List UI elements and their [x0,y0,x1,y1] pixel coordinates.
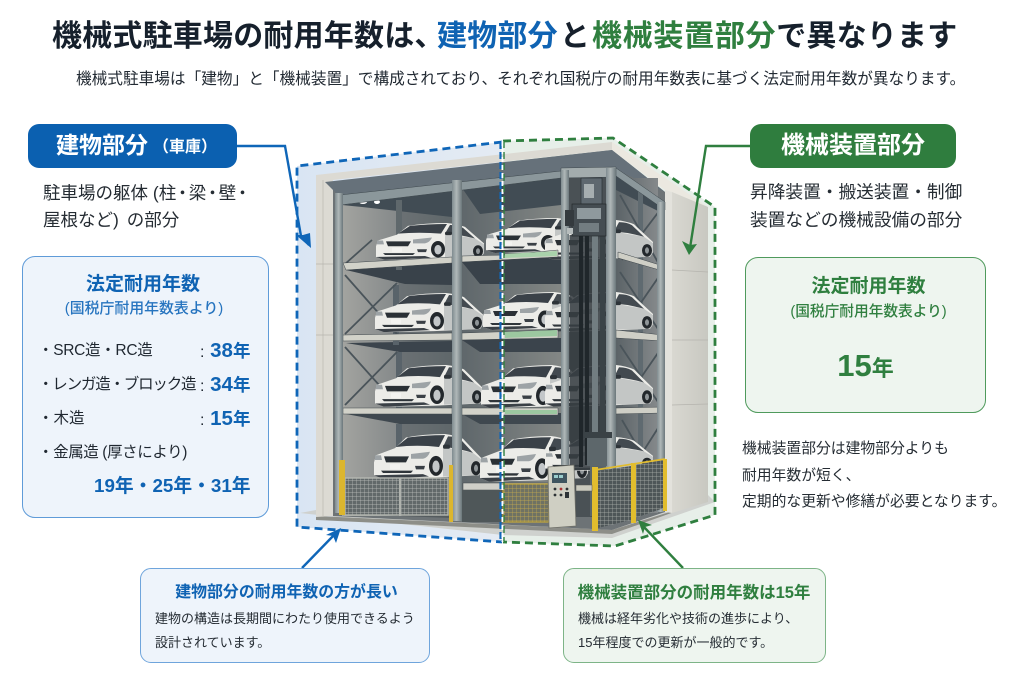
row: wood: ・木造 [38,410,85,427]
callout heading: 建物部分の耐用年数の方が長い [175,584,398,601]
region: machinery part tint [503,138,715,546]
arrow: building callout to structure [302,528,341,568]
badge: machinery part [750,124,956,168]
description: machinery part: 昇降装置・搬送装置・制御 [750,182,962,202]
parking bays back walls [342,172,660,520]
dashed outline: machinery part [503,138,715,546]
parked cars [374,218,653,482]
safety fences [339,459,667,531]
callout body: 機械は経年劣化や技術の進歩により、 [578,611,798,626]
callout body: 設計されています。 [155,635,270,650]
callout: building part [140,568,430,663]
floor slab [300,495,715,538]
value: 15 years: 15年 [837,348,894,383]
value: 34 years: : 34年 [200,373,250,396]
lift mechanism [565,178,612,516]
arrow: building badge to structure [237,146,311,248]
shelves [343,250,663,522]
callout body: 15年程度での更新が一般的です。 [578,635,773,650]
description: machinery part [750,182,962,230]
description: building part: 駐車場の躯体 (柱・梁・壁・ [43,183,249,203]
value: 38 years: : 38年 [200,339,250,362]
row: brick block: ・レンガ造・ブロック造 [38,376,195,393]
callout body [578,611,798,650]
callout body: 建物の構造は長期間にわたり使用できるよう [155,611,415,626]
steel columns and beams [335,167,665,523]
panel source: (国税庁耐用年数表より) [790,304,947,320]
value: 15 years: : 15年 [200,407,250,430]
panel heading: 法定耐用年数 [811,276,926,297]
value: metal years: 19年・25年・31年 [94,475,251,496]
description: building part [43,183,249,230]
badge: building part [28,124,237,168]
arrow: machinery badge to structure [682,146,750,255]
panel: machinery useful life [745,257,986,413]
panel: building useful life [22,256,269,518]
badge label: 機械装置部分 [781,132,925,159]
row: SRC RC: ・SRC造・RC造 [38,342,152,359]
panel source: (国税庁耐用年数表より) [65,301,223,317]
note: machinery part [742,440,1006,510]
badge label: 建物部分 （車庫） [56,132,217,158]
callout: machinery part [563,568,826,663]
bracing [345,195,660,485]
region: building part tint [297,142,502,542]
description: machinery part: 装置などの機械設備の部分 [750,210,962,230]
dashed outline: building part [297,142,502,542]
concrete shell [316,142,708,530]
row: metal: ・金属造 (厚さにより) [38,444,187,461]
panel heading: 法定耐用年数 [86,274,200,295]
subtitle: 機械式駐車場は「建物」と「機械装置」で構成されており、それぞれ国税庁の耐用年数表に基づく法定耐用年数が異なります。 [76,71,965,88]
note: machinery part: 機械装置部分は建物部分よりも [742,441,949,457]
arrow: machinery callout to structure [638,520,683,568]
callout body [155,611,415,650]
note: machinery part: 耐用年数が短く、 [742,468,860,484]
control panel [548,465,592,528]
title: 機械式駐車場の耐用年数は、建物部分と機械装置部分で異なります [52,20,957,53]
description: building part: 屋根など) の部分 [43,210,179,230]
divider between parts [500,141,504,542]
callout heading: 機械装置部分の耐用年数は15年 [578,584,810,602]
note: machinery part: 定期的な更新や修繕が必要となります。 [742,494,1006,510]
